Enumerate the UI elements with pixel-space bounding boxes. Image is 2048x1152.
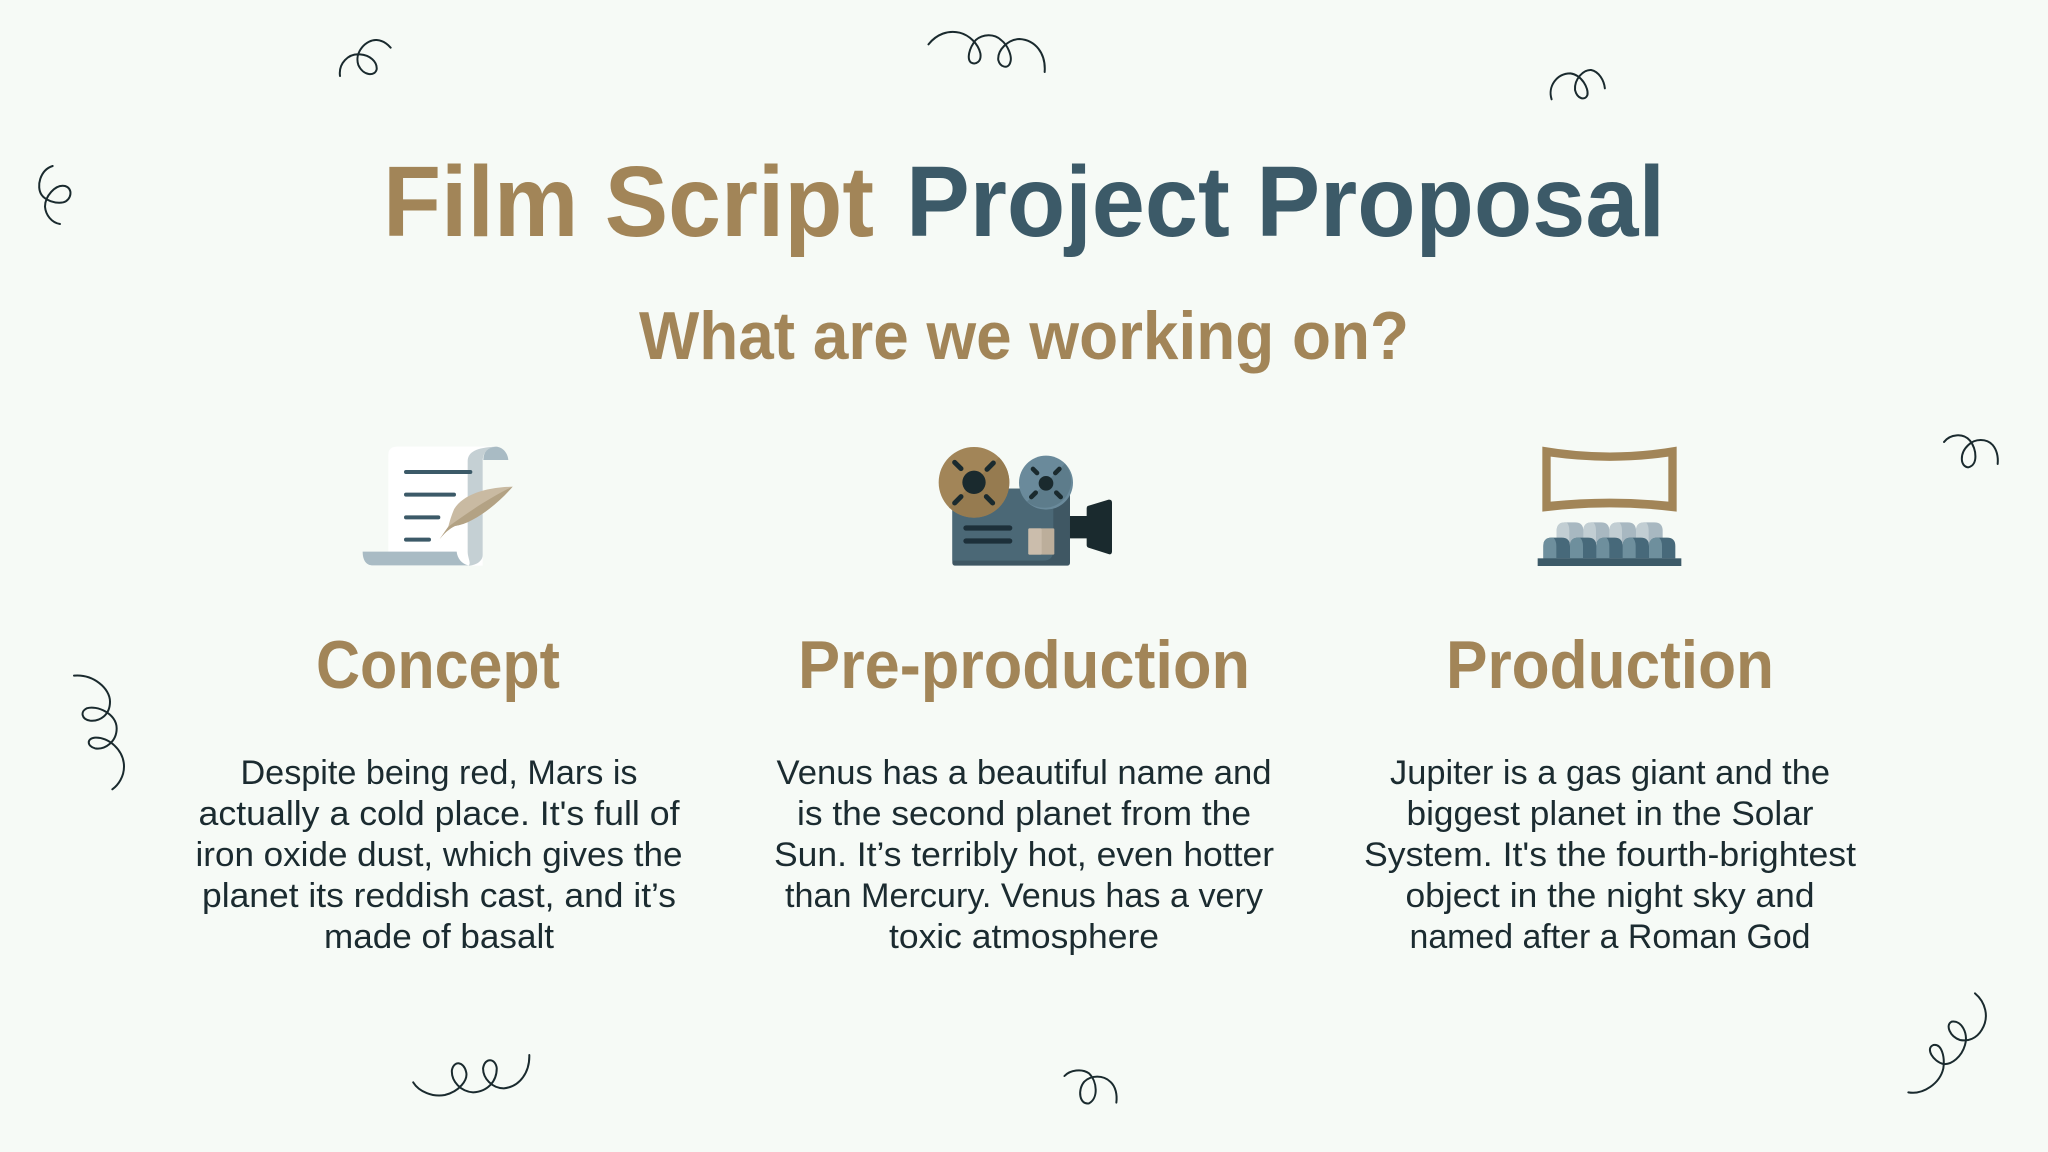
squiggle: far left <box>39 166 70 224</box>
panel: pre-production <box>774 447 1274 956</box>
text block: Production description: biggest planet in the Solar <box>1406 795 1814 833</box>
subtitle: What are we working on? <box>639 298 1409 374</box>
text block: Production description: object in the night sky and <box>1406 877 1814 915</box>
text block: Concept description: actually a cold place. It's full of <box>198 795 680 833</box>
text block: Pre-production description <box>774 754 1274 956</box>
squiggle: left middle <box>74 676 124 789</box>
text block: Pre-production description: Sun. It’s terribly hot, even hotter <box>774 836 1274 874</box>
heading: Concept: Concept <box>316 627 560 703</box>
text block: Concept description <box>196 754 682 956</box>
text block: Pre-production description: toxic atmosphere <box>889 918 1159 956</box>
text block: Pre-production description: Venus has a beautiful name and <box>776 754 1272 792</box>
text block: Pre-production description: is the second planet from the <box>797 795 1251 833</box>
squiggle: right middle <box>1944 435 1998 467</box>
title: Project Proposal <box>906 146 1665 258</box>
title: Film Script <box>383 146 874 258</box>
text block: Concept description: planet its reddish cast, and it’s <box>202 877 676 915</box>
text block: Concept description: iron oxide dust, which gives the <box>196 836 682 874</box>
squiggle: bottom center <box>1064 1070 1117 1103</box>
squiggle: top center <box>928 32 1045 72</box>
text block: Production description: Jupiter is a gas giant and the <box>1390 754 1830 792</box>
panel: concept <box>196 447 682 956</box>
panel: production <box>1364 447 1857 956</box>
icon: script scroll with quill <box>363 447 513 566</box>
title <box>383 146 1665 258</box>
text block: Pre-production description: than Mercury. Venus has a very <box>785 877 1263 915</box>
squiggle: bottom left <box>413 1055 529 1096</box>
icon: cinema screen and seats <box>1538 447 1681 566</box>
text block: Production description: named after a Roman God <box>1410 918 1810 956</box>
text block: Concept description: made of basalt <box>324 918 555 956</box>
heading: Pre-production: Pre-production <box>798 627 1250 703</box>
text block: Production description <box>1364 754 1857 956</box>
heading: Production: Production <box>1446 627 1774 703</box>
text block: Production description: System. It's the fourth-brightest <box>1364 836 1857 874</box>
icon: film projector <box>939 447 1112 566</box>
squiggle: bottom right <box>1908 993 1986 1093</box>
squiggle: top left <box>340 40 391 76</box>
squiggle: top right <box>1551 70 1605 99</box>
text block: Concept description: Despite being red, Mars is <box>240 754 638 792</box>
